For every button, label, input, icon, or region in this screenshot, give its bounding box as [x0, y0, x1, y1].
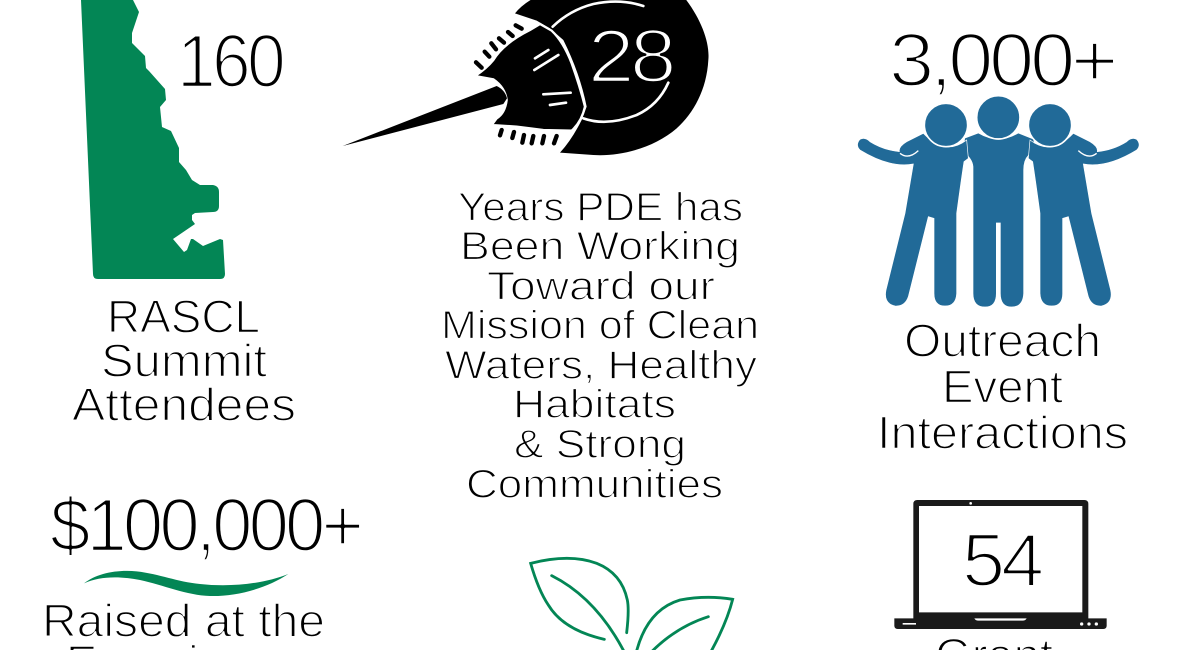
center head	[977, 96, 1020, 139]
panel: money raised	[42, 483, 361, 650]
right leaf vein	[652, 617, 708, 650]
panel: grants	[894, 500, 1107, 650]
left leaf	[531, 558, 628, 639]
crab rear shell	[515, 0, 709, 155]
label: RASCL Summit Attendees	[72, 290, 296, 430]
label: mission statement: Toward our	[487, 264, 715, 308]
icon: Delaware state map	[81, 0, 225, 279]
icon: three people embracing	[857, 96, 1139, 307]
left person body	[857, 133, 968, 306]
number: $100,000+: $100,000+	[50, 483, 361, 567]
crab tail spine	[343, 86, 507, 146]
label: mission statement: & Strong	[514, 422, 686, 466]
label: mission statement: Years PDE has	[458, 186, 743, 230]
label: Raised at the Experience: Raised at the	[42, 594, 325, 646]
label: RASCL Summit Attendees: Attendees	[72, 378, 296, 430]
label: mission statement: Habitats	[513, 382, 676, 426]
number: 3,000+: 3,000+	[889, 18, 1115, 102]
laptop base	[894, 618, 1107, 629]
label: RASCL Summit Attendees: Summit	[101, 334, 267, 386]
right person body	[1028, 133, 1139, 306]
label: mission statement: Waters, Healthy	[445, 344, 757, 388]
label: mission statement	[441, 186, 759, 506]
label: RASCL Summit Attendees: RASCL	[107, 290, 260, 342]
label: Outreach Event Interactions: Outreach	[904, 314, 1101, 366]
center person body	[963, 133, 1035, 307]
right leaf	[636, 597, 733, 650]
arm crease lines	[900, 151, 1097, 156]
laptop details	[903, 618, 1027, 625]
laptop dots	[969, 502, 1098, 626]
number: 28: 28	[588, 14, 673, 98]
panel: RASCL summit attendees	[72, 0, 296, 430]
icon: horseshoe crab	[343, 0, 709, 155]
icon: laptop	[894, 500, 1107, 629]
crab leg ticks	[476, 25, 557, 143]
crab head	[475, 24, 585, 131]
label: mission statement: Communities	[466, 462, 723, 506]
right head	[1028, 103, 1072, 147]
icon: green wave	[84, 571, 288, 596]
number: 160: 160	[177, 19, 283, 103]
label: Outreach Event Interactions: Event	[942, 360, 1063, 412]
laptop screen frame	[913, 500, 1088, 620]
label: Outreach Event Interactions: Interactions	[877, 406, 1128, 458]
label: mission statement: Mission of Clean	[441, 304, 759, 348]
panel: outreach interactions	[857, 18, 1139, 458]
number: 54: 54	[962, 518, 1042, 602]
icon: leaves sprout	[531, 558, 733, 650]
panel: years working	[343, 0, 759, 507]
crab head marks	[534, 50, 571, 105]
label: Outreach Event Interactions	[877, 314, 1128, 458]
left leaf vein	[552, 576, 625, 650]
crab shell arcs	[553, 2, 668, 122]
left head	[924, 103, 968, 147]
label: mission statement: Been Working	[460, 224, 740, 268]
